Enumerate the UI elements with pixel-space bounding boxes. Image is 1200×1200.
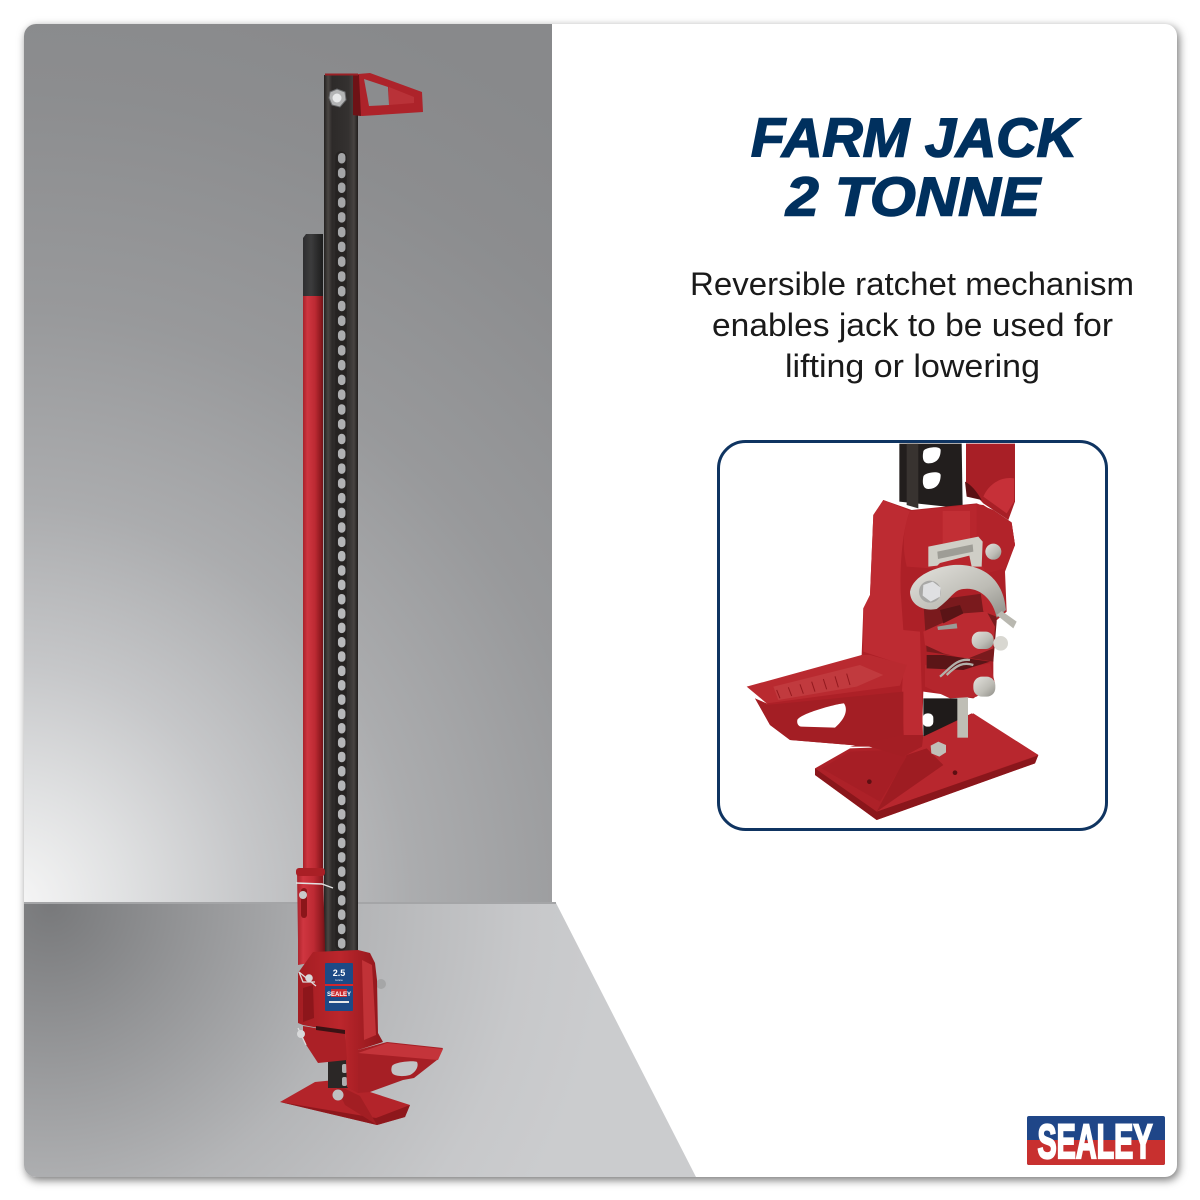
jack product label: 2.5 <box>333 968 345 978</box>
silver crescent <box>910 565 1006 618</box>
casting front face <box>904 504 1015 572</box>
base pin holes <box>867 770 957 784</box>
crescent bolt <box>919 581 941 603</box>
title: 2 TONNE <box>785 166 1042 228</box>
casting square boss <box>943 511 970 544</box>
silver slide <box>957 692 968 738</box>
foot tread <box>747 655 907 703</box>
rack bar <box>324 75 358 955</box>
base plate <box>815 713 1038 820</box>
description text: enables jack to be used for <box>712 307 1113 343</box>
lower pawl <box>925 655 995 698</box>
side pin <box>376 979 386 989</box>
base plate <box>280 1080 410 1125</box>
handle tube <box>303 296 323 872</box>
silver stud <box>997 611 1017 628</box>
silver latch <box>928 537 983 567</box>
jack product label: SEALEY <box>327 992 351 998</box>
jack product label <box>325 963 353 1011</box>
pin clips <box>297 972 344 1100</box>
jack product label: tonne <box>335 978 343 982</box>
base bolt <box>931 742 946 757</box>
casting body <box>755 500 1015 757</box>
title: FARM JACK <box>751 106 1081 168</box>
foot plate <box>347 1042 443 1093</box>
main casting <box>298 950 383 1093</box>
panel: detail inset of ratchet mechanism <box>718 442 1106 830</box>
top bolt <box>329 89 346 107</box>
description text: Reversible ratchet mechanism <box>690 266 1134 302</box>
description text <box>690 266 1134 384</box>
handle socket <box>296 868 333 965</box>
dark recess behind pawls <box>923 592 997 662</box>
casting left face <box>863 500 923 755</box>
description text: lifting or lowering <box>785 348 1040 384</box>
upper pawl <box>923 605 1008 659</box>
rack bar <box>899 444 963 508</box>
detail jack photo <box>747 444 1038 820</box>
foot overlap on base <box>850 735 923 757</box>
main jack photo <box>280 73 443 1125</box>
foot slot <box>797 703 846 728</box>
rack holes <box>335 157 347 945</box>
arm <box>966 444 1015 520</box>
lower rack section <box>328 1060 348 1088</box>
handle grip <box>303 234 323 297</box>
title <box>751 106 1081 228</box>
panel: room backdrop <box>24 24 696 1177</box>
lower rack <box>923 698 958 737</box>
pivot pin <box>985 544 1001 560</box>
top bracket <box>325 73 423 116</box>
